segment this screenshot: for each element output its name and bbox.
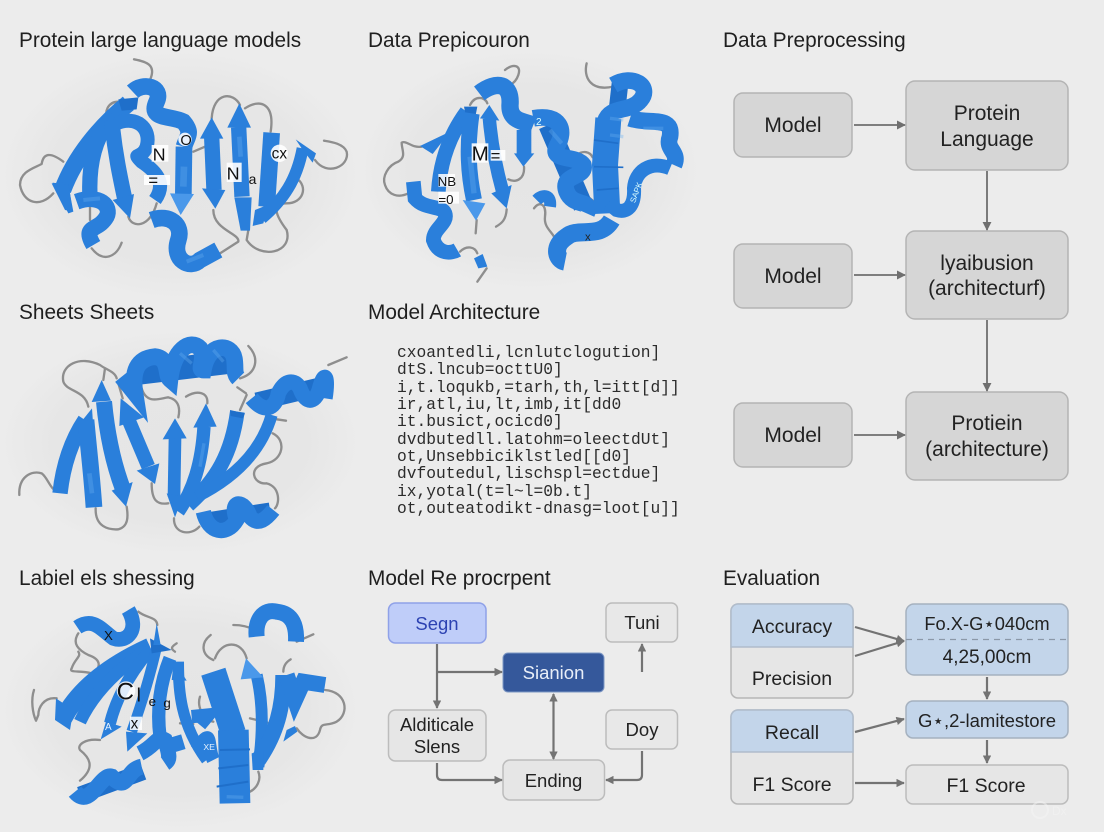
box: Model 1 bbox=[734, 93, 852, 157]
node: Ending bbox=[503, 760, 604, 800]
residue labels: = bbox=[148, 171, 158, 190]
node: Segn: Segn bbox=[415, 613, 459, 634]
residue labels bbox=[104, 628, 215, 752]
box: Model 3: Model bbox=[764, 424, 822, 447]
node: Segn bbox=[388, 603, 486, 643]
alpha helices bbox=[413, 81, 675, 268]
residue labels: C bbox=[117, 678, 134, 705]
residue labels: l bbox=[137, 686, 141, 707]
box: Protiein: Protiein bbox=[951, 412, 1023, 435]
coil loops bbox=[20, 59, 347, 257]
residue labels bbox=[438, 117, 644, 244]
beta strands bbox=[420, 105, 534, 221]
faint watermark: Dx bbox=[1052, 804, 1067, 818]
result box: values: 4,25,00cm bbox=[943, 647, 1031, 668]
protein ribbon illustration 1 bbox=[20, 59, 347, 264]
coil loops bbox=[384, 63, 613, 282]
residue labels: g bbox=[163, 695, 171, 710]
heading: Evaluation: Evaluation bbox=[723, 567, 820, 590]
evaluation metrics flow bbox=[731, 604, 1068, 818]
protein ribbon illustration 4 bbox=[32, 610, 345, 803]
node: Alditicale Slens bbox=[388, 710, 486, 761]
node: Doy: Doy bbox=[626, 719, 659, 740]
beta strands bbox=[60, 380, 272, 517]
result box: F1 Score: F1 Score bbox=[946, 775, 1026, 797]
flow diagram: data preprocessing bbox=[734, 81, 1068, 480]
box: Protein Language: Protein bbox=[954, 102, 1020, 125]
code block: it.busict,ocicd0] bbox=[397, 412, 563, 431]
node: Sianion: Sianion bbox=[523, 662, 584, 683]
metric arrows bbox=[855, 627, 987, 783]
card: Accuracy and Precision bbox=[731, 604, 853, 698]
heading: Labiel els shessing: Labiel els shessing bbox=[19, 567, 195, 590]
beta strands bbox=[52, 97, 316, 231]
node: Doy bbox=[606, 710, 678, 749]
code block: dvfoutedul,lischspl=ectdue] bbox=[397, 464, 660, 483]
box: Model 1: Model bbox=[764, 114, 822, 137]
code block: cxoantedli,lcnlutclogution] bbox=[397, 343, 660, 362]
heading: Model Re procrpent: Model Re procrpent bbox=[368, 567, 551, 590]
code block: dtS.lncub=octtU0] bbox=[397, 360, 563, 379]
coil loops bbox=[19, 346, 347, 532]
result box: values bbox=[906, 604, 1068, 675]
result box: values: Fo.X-G⋆040cm bbox=[924, 613, 1050, 634]
box: Protiein bbox=[906, 392, 1068, 480]
residue labels: M bbox=[472, 143, 489, 166]
residue labels: A bbox=[105, 722, 112, 733]
residue labels: O bbox=[180, 133, 192, 149]
alpha helices bbox=[75, 610, 325, 803]
residue labels bbox=[144, 133, 288, 190]
box: lyaibusion: (architecturf) bbox=[928, 277, 1046, 300]
arrows bbox=[854, 125, 987, 435]
result box: lamitestore bbox=[906, 701, 1068, 738]
box: Model 2: Model bbox=[764, 265, 822, 288]
coil loops bbox=[32, 612, 345, 792]
node: Tuni: Tuni bbox=[624, 612, 660, 633]
heading: Data Prepicouron: Data Prepicouron bbox=[368, 29, 530, 52]
faint watermark bbox=[1032, 802, 1067, 818]
box: Model 3 bbox=[734, 403, 852, 467]
node: Alditicale Slens: Alditicale bbox=[400, 714, 474, 735]
code block: i,t.loqukb,=tarh,th,l=itt[d]] bbox=[397, 378, 680, 397]
beta strands bbox=[55, 623, 297, 770]
flow diagram: model re procrpent bbox=[388, 603, 678, 800]
residue labels: XE bbox=[203, 742, 215, 752]
residue labels: x bbox=[131, 716, 139, 733]
box: Model 2 bbox=[734, 244, 852, 308]
result box: F1 Score bbox=[906, 765, 1068, 804]
residue labels: X bbox=[104, 628, 113, 643]
code block: ix,yotal(t=l~l=0b.t] bbox=[397, 482, 592, 501]
residue labels: NB bbox=[438, 174, 456, 189]
card: Recall and F1 Score bbox=[731, 710, 853, 804]
box: lyaibusion: lyaibusion bbox=[940, 252, 1034, 275]
residue labels: 2 bbox=[536, 117, 542, 128]
code block: dvdbutedll.latohm=oleectdUt] bbox=[397, 430, 670, 449]
card: Accuracy and Precision: Precision bbox=[752, 668, 832, 690]
box: Protiein: (architecture) bbox=[925, 438, 1049, 461]
residue labels: x bbox=[585, 232, 591, 244]
protein ribbon illustration 2 bbox=[384, 63, 675, 282]
heading: Data Preprocessing: Data Preprocessing bbox=[723, 29, 906, 52]
residue labels: cx bbox=[272, 145, 287, 162]
residue labels: = bbox=[491, 147, 500, 166]
code block bbox=[397, 343, 680, 518]
residue labels: e bbox=[149, 694, 156, 709]
node: Ending: Ending bbox=[525, 770, 582, 791]
alpha helices bbox=[122, 345, 327, 531]
residue labels: N bbox=[227, 163, 240, 183]
card: Recall and F1 Score: Recall bbox=[765, 722, 819, 744]
card: Accuracy and Precision: Accuracy bbox=[752, 616, 832, 638]
box: Protein Language: Language bbox=[940, 128, 1034, 151]
code block: ot,Unsebbiciklstled[[d0] bbox=[397, 447, 631, 466]
connector arrows bbox=[437, 644, 642, 780]
node: Sianion bbox=[503, 653, 604, 692]
node: Tuni bbox=[606, 603, 678, 642]
residue labels: a bbox=[249, 171, 257, 187]
protein ribbon illustration 3 bbox=[19, 345, 347, 532]
heading: Sheets Sheets: Sheets Sheets bbox=[19, 301, 154, 324]
heading: Protein large language models: Protein large language models bbox=[19, 29, 301, 52]
card: Recall and F1 Score: F1 Score bbox=[752, 774, 832, 796]
residue labels: SAPK bbox=[628, 180, 644, 204]
heading: Model Architecture: Model Architecture bbox=[368, 301, 540, 324]
alpha helices bbox=[53, 86, 218, 264]
code block: ir,atl,iu,lt,imb,it[dd0 bbox=[397, 395, 621, 414]
code block: ot,outeatodikt-dnasg=loot[u]] bbox=[397, 499, 680, 518]
residue labels: =0 bbox=[438, 192, 454, 207]
result box: lamitestore: G⋆,2-lamitestore bbox=[918, 710, 1056, 731]
residue labels: N bbox=[153, 145, 166, 165]
node: Alditicale Slens: Slens bbox=[414, 736, 460, 757]
box: lyaibusion bbox=[906, 231, 1068, 319]
box: Protein Language bbox=[906, 81, 1068, 170]
